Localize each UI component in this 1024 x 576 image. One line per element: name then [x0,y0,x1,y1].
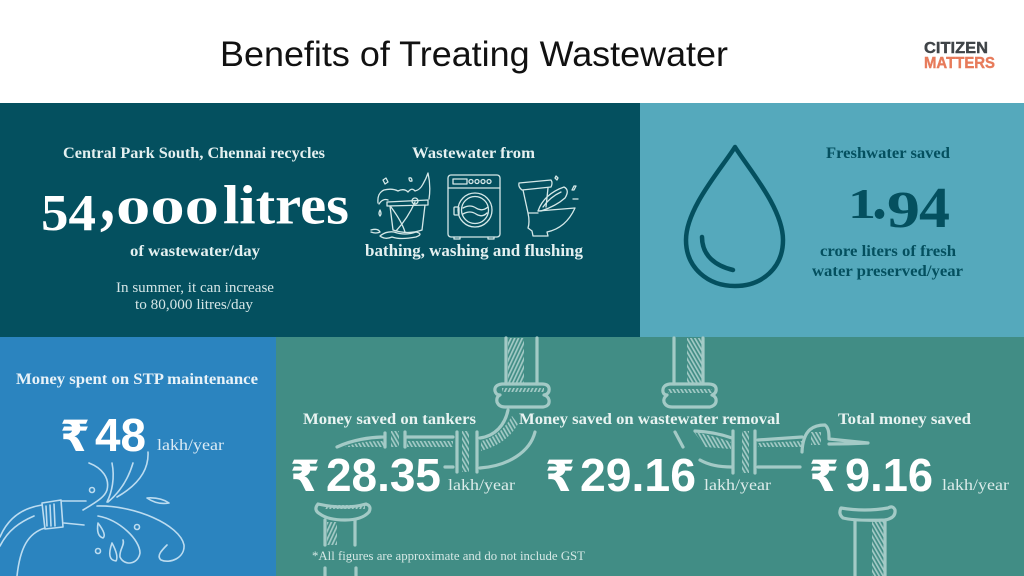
big number: 1.94: 9 [887,182,920,239]
big number: 54,000 litres: litres [223,174,349,236]
logo: Citizen Matters: MATTERS [924,55,995,72]
panel: header [0,0,1024,103]
panel: STP maintenance [0,337,276,576]
value: 48 lakh per year [60,409,225,462]
panel: money saved [276,337,1024,576]
panel: freshwater saved [640,103,1024,337]
text: bathing, washing and flushing: bathing, washing and flushing [365,241,584,260]
saving: tankers: lakh/year [448,477,516,494]
big number: 1.94: 1 [848,182,876,228]
saving: tankers: 28.35 [326,449,441,501]
saving: total: ₹ [809,452,854,502]
text: summer note: In summer, it can increase [116,280,274,296]
title: Benefits of Treating Wastewater [220,35,728,74]
big number: 54,000 litres: 54 [41,185,96,242]
value: 48 lakh per year: 48 [95,409,146,461]
logo: Citizen Matters: CITIZEN [924,40,988,57]
saving: tankers: ₹ [290,452,335,502]
text: money spent heading: Money spent on STP maintenance [16,371,258,388]
saving: wastewater removal: ₹ [545,452,590,502]
text: crore liters preserved: water preserved/year [812,263,963,280]
saving: wastewater removal: Money saved on wastewater removal [519,411,781,428]
saving: total [809,411,1010,502]
saving: wastewater removal: 29.16 [580,449,696,501]
illustration: right pipe [663,338,895,576]
saving: wastewater removal [519,411,781,502]
text: summer note [116,280,274,313]
saving: wastewater removal: lakh/year [704,477,772,494]
illustration: left pipe [316,338,549,576]
panel: recycled wastewater [0,103,640,337]
saving: tankers: Money saved on tankers [303,411,476,428]
text: crore liters preserved: crore liters of fresh [820,243,956,260]
icon: washing machine [448,175,500,239]
value: 48 lakh per year: ₹ [60,412,105,462]
saving: total: Total money saved [838,411,971,428]
big number: 1.94: . [872,164,887,232]
text: of wastewater per day: of wastewater/day [130,243,260,260]
saving: total: 9.16 [845,449,933,501]
footnote: *All figures are approximate and do not include GST [312,548,585,563]
icon: bucket [371,173,430,238]
text: freshwater saved heading: Freshwater saved [826,145,950,162]
big number: 1.94: 4 [919,175,950,240]
saving: total: lakh/year [942,477,1010,494]
text: crore liters preserved [812,243,963,280]
text: summer note: to 80,000 litres/day [135,297,254,313]
big number: 54,000 litres: , [100,157,115,237]
value: 48 lakh per year: lakh/year [157,437,225,454]
saving: tankers [290,411,516,502]
illustration: hose spraying water [0,452,184,576]
logo: Citizen Matters [924,40,995,72]
text: wastewater from: Wastewater from [412,145,536,162]
big number: 54,000 litres: 000 [116,190,219,232]
text: recycling intro: Central Park South, Chennai recycles [63,145,325,162]
icon: water drop [686,147,783,286]
icon: toilet [519,176,578,236]
